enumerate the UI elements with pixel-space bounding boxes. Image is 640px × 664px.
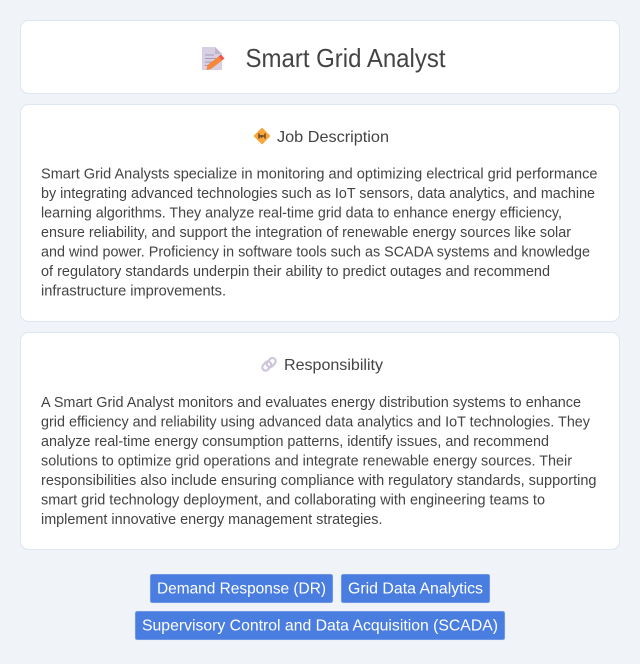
tag: grid data analytics: Grid Data Analytics bbox=[348, 580, 483, 598]
text block: responsibility: solutions to optimize grid operations and integrate renewable energy sources. Their bbox=[41, 454, 572, 470]
text block: job description: infrastructure improvements. bbox=[41, 284, 226, 300]
panel: title card bbox=[20, 20, 620, 94]
text block: job description: ensure reliability, and support the integration of renewable energy sources like solar bbox=[41, 225, 571, 241]
icon: orange diamond sign bbox=[254, 128, 270, 144]
tag: grid data analytics bbox=[341, 574, 490, 603]
heading: job description: Job Description bbox=[277, 129, 389, 146]
text block: job description: learning algorithms. They analyze real-time grid data to enhance energy efficiency, bbox=[41, 206, 562, 222]
text block: responsibility: grid efficiency and reliability using advanced data analytics and IoT technologies. They bbox=[41, 414, 591, 430]
text block: job description: by integrating advanced technologies such as IoT sensors, data analytics, and machine bbox=[41, 186, 595, 202]
title: Smart Grid Analyst bbox=[246, 45, 446, 73]
text block: responsibility: analyze real-time energy consumption patterns, identify issues, and recommend bbox=[41, 434, 549, 450]
text block: job description: of regulatory standards underpin their ability to predict outages and recommend bbox=[41, 264, 550, 280]
icon: memo with pencil bbox=[202, 47, 224, 70]
panel: job description bbox=[20, 104, 620, 322]
text block: job description: and wind power. Proficiency in software tools such as SCADA systems and knowledge bbox=[41, 244, 590, 260]
tag: scada: Supervisory Control and Data Acquisition (SCADA) bbox=[142, 618, 498, 634]
text block: responsibility: responsibilities also include ensuring compliance with regulatory standards, supporting bbox=[41, 473, 596, 489]
tag: demand response: Demand Response (DR) bbox=[157, 580, 326, 598]
text block: responsibility bbox=[41, 395, 596, 528]
heading: responsibility: Responsibility bbox=[284, 357, 383, 374]
tag: scada bbox=[135, 611, 505, 640]
text block: responsibility: smart grid technology deployment, and collaborating with engineering teams to bbox=[41, 492, 545, 508]
text block: job description bbox=[41, 166, 598, 300]
text block: responsibility: A Smart Grid Analyst monitors and evaluates energy distribution systems to enhance bbox=[41, 395, 581, 411]
tag: demand response bbox=[150, 574, 333, 603]
text block: responsibility: implement innovative energy management strategies. bbox=[41, 512, 382, 528]
panel: responsibility bbox=[20, 332, 620, 550]
icon: chain link bbox=[261, 357, 277, 372]
text block: job description: Smart Grid Analysts specialize in monitoring and optimizing electrical grid performance bbox=[41, 166, 598, 182]
